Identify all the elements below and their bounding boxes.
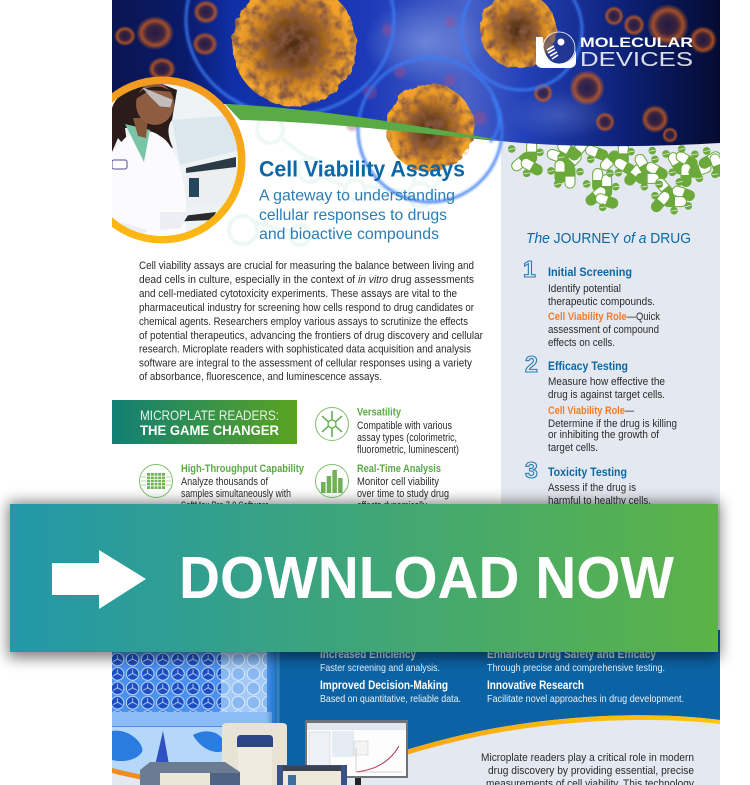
step 2: efficacy testing: or inhibiting the growth of (548, 429, 660, 441)
decoration: faint molecule background (229, 117, 460, 245)
logo: Molecular Devices: DEVICES (580, 49, 693, 71)
panel: microplate readers heading (112, 400, 297, 444)
intro paragraph: of potential therapeutics, advancing the frontiers of drug discovery and cellular (139, 330, 483, 342)
capsules (511, 143, 720, 212)
step 3: toxicity testing: Assess if the drug is (548, 482, 636, 494)
closing paragraph (481, 752, 694, 785)
intro paragraph: research. Microplate readers with sophisticated data acquisition and analysis (139, 344, 471, 356)
feature: versatility: fluorometric, luminescent) (357, 444, 459, 456)
scrub collar (125, 124, 150, 162)
step 3: toxicity testing: Toxicity Testing (548, 467, 627, 479)
subtitle: and bioactive compounds (259, 226, 439, 243)
benefit: enhanced drug safety: Enhanced Drug Safety and Efficacy (487, 647, 656, 661)
lab coat (112, 131, 186, 240)
benefit: improved decision-making: Improved Decision-Making (320, 678, 448, 692)
photo: scientist in circle (112, 76, 246, 244)
feature: real-time analysis: over time to study drug (357, 488, 449, 500)
instrument: computer monitor (305, 720, 408, 785)
benefit: increased efficiency (320, 647, 440, 674)
button label: DOWNLOAD NOW (179, 545, 674, 611)
benefits text (320, 647, 684, 705)
intro paragraph: pharmaceutical industry for screening how cells respond to drug candidates or (139, 302, 474, 314)
benefit: improved decision-making (320, 678, 461, 705)
safety glasses (143, 88, 172, 107)
feature: versatility: Versatility (357, 406, 402, 418)
step 2: efficacy testing: 2 (525, 351, 538, 377)
feature: high-throughput capability: Analyze thousands of (181, 476, 269, 488)
icon: high-throughput microplate (140, 464, 172, 498)
instrument: microplate reader tall (222, 723, 287, 785)
step 2: efficacy testing: Measure how effective the (548, 376, 665, 388)
button: download now (10, 504, 718, 652)
plate and hands (184, 212, 216, 222)
hero image: cells (112, 0, 720, 202)
subtitle: cellular responses to drugs (259, 207, 447, 224)
benefit: innovative research: Facilitate novel approaches in drug development. (487, 693, 684, 705)
feature: versatility (357, 406, 459, 456)
panel: benefits blue band (112, 630, 720, 785)
green swoosh (225, 104, 500, 140)
benefit: increased efficiency: Increased Efficiency (320, 647, 416, 661)
feature: high-throughput capability: samples simultaneously with (181, 488, 291, 500)
intro paragraph: and cell-mediated cytotoxicity experiments. These assays are vital to the (139, 288, 457, 300)
feature: high-throughput capability (181, 463, 305, 512)
step 2: efficacy testing: Cell Viability Role— (548, 405, 634, 417)
photo: microplate with gloved hands (112, 652, 280, 774)
benefit: improved decision-making: Based on quantitative, reliable data. (320, 693, 461, 705)
feature: versatility: assay types (colorimetric, (357, 432, 457, 444)
benefit: enhanced drug safety: Through precise and comprehensive testing. (487, 662, 665, 674)
panel: microplate readers heading: MICROPLATE READERS: (140, 407, 279, 423)
subtitle: A gateway to understanding (259, 188, 455, 204)
step 2: efficacy testing: Determine if the drug is killing (548, 418, 677, 430)
icon: arrow (52, 550, 146, 609)
intro paragraph: dead cells in culture, especially in the context of in vitro drug assessments (139, 274, 474, 286)
step 3: toxicity testing: harmful to healthy cells. (548, 495, 651, 507)
step 1: initial screening: Initial Screening (548, 267, 632, 279)
step 1: initial screening: therapeutic compounds. (548, 296, 655, 308)
instrument: microplate reader compact (277, 765, 347, 785)
icon: real-time bar chart (316, 464, 348, 498)
logo: Molecular Devices (536, 32, 693, 71)
step 2: efficacy testing (525, 351, 677, 454)
hair (112, 84, 177, 152)
feature: real-time analysis (357, 463, 449, 512)
subtitle (259, 188, 455, 243)
logo wordmark: MOLECULAR (580, 34, 693, 50)
intro paragraph: software are integral to the assessment of cellular responses using a variety (139, 358, 472, 370)
feature: real-time analysis: effects dynamically (357, 500, 427, 512)
step 3: toxicity testing: 3 (525, 457, 538, 483)
lower grey panel (112, 700, 720, 785)
face (136, 83, 174, 125)
feature: high-throughput capability: High-Throughput Capability (181, 463, 305, 475)
benefit: increased efficiency: Faster screening and analysis. (320, 662, 440, 674)
feature: versatility: Compatible with various (357, 420, 452, 432)
closing paragraph: drug discovery by providing essential, precise (488, 765, 694, 777)
button shadow (8, 502, 720, 658)
orange-yellow swoosh (112, 715, 720, 785)
benefit: enhanced drug safety (487, 647, 665, 674)
feature: high-throughput capability: SoftMax Pro 7.0 Software (181, 500, 269, 512)
logo mark (536, 32, 576, 68)
step 3: toxicity testing (525, 457, 651, 507)
panel: microplate readers heading: THE GAME CHANGER (140, 422, 279, 438)
feature: real-time analysis: Real-Time Analysis (357, 463, 441, 475)
intro paragraph: Cell viability assays are crucial for measuring the balance between living and (139, 260, 474, 272)
step 2: efficacy testing: Efficacy Testing (548, 361, 628, 373)
round tablets (508, 145, 719, 214)
step 1: initial screening: 1 (523, 256, 536, 282)
intro paragraph: of absorbance, fluorescence, and luminescence assays. (139, 371, 382, 383)
feature: real-time analysis: Monitor cell viability (357, 476, 439, 488)
instrument (186, 157, 236, 207)
icon: versatility arrows (316, 408, 348, 440)
step 2: efficacy testing: target cells. (548, 442, 598, 454)
step 1: initial screening: Cell Viability Role—Quick (548, 311, 660, 323)
closing paragraph: Microplate readers play a critical role in modern (481, 752, 694, 764)
panel: sidebar background (501, 135, 720, 735)
illustration: green pills cluster (508, 138, 726, 214)
benefit: innovative research: Innovative Research (487, 678, 584, 692)
intro paragraph (139, 260, 483, 383)
benefit: innovative research (487, 678, 684, 705)
step 1: initial screening: Identify potential (548, 283, 621, 295)
intro paragraph: chemical agents. Researchers employ various assays to scrutinize the effects (139, 316, 468, 328)
title: Cell Viability Assays (259, 156, 465, 182)
sidebar heading: the journey of a drug: The JOURNEY of a DRUG (526, 230, 691, 247)
step 1: initial screening: assessment of compound (548, 324, 659, 336)
step 1: initial screening: effects on cells. (548, 337, 615, 349)
step 2: efficacy testing: drug is against target cells. (548, 389, 665, 401)
step 1: initial screening (523, 256, 660, 349)
instrument: microplate reader wide (140, 762, 240, 785)
